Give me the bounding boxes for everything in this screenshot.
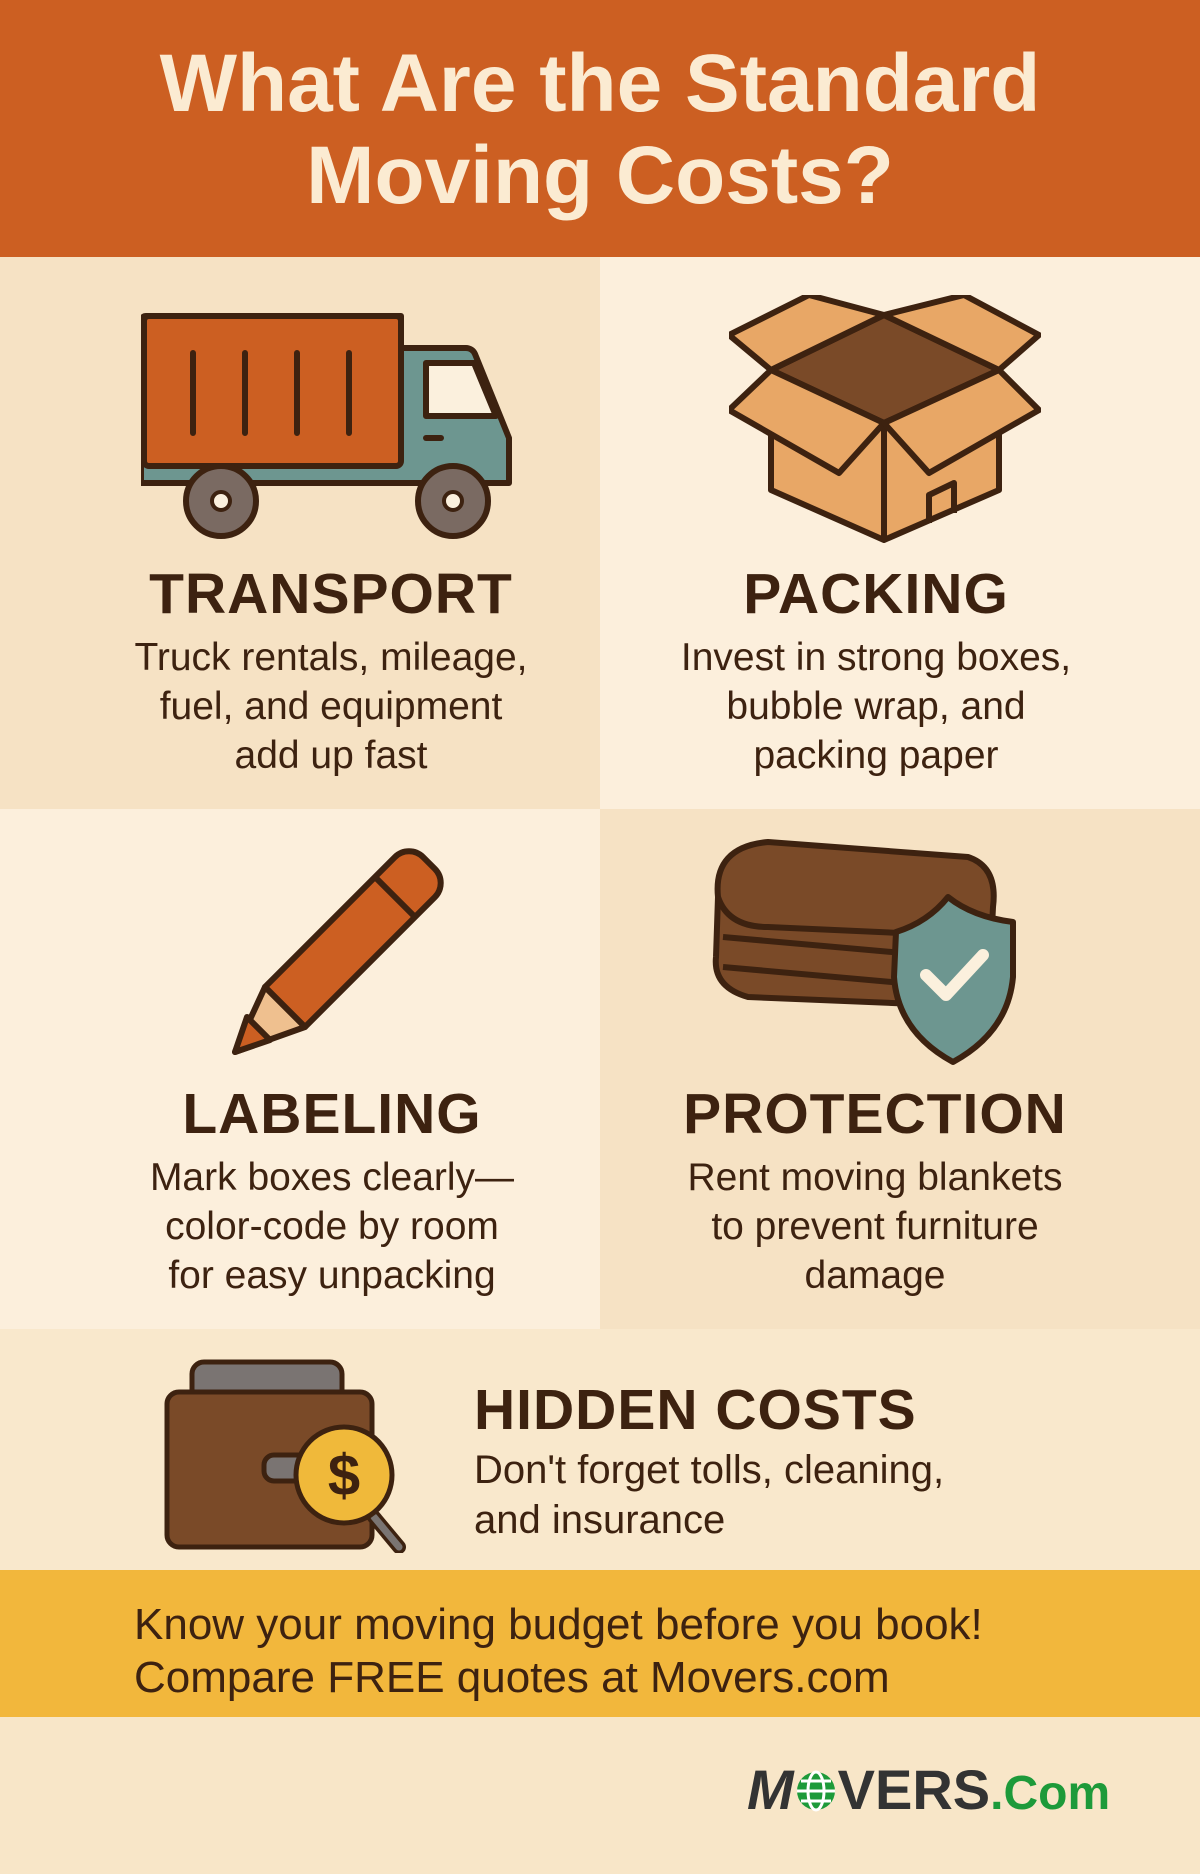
title: What Are the Standard bbox=[160, 38, 1040, 129]
heading: labeling: LABELING bbox=[182, 1082, 482, 1146]
callout text bbox=[134, 1600, 983, 1702]
logo: movers.com: M VERS.Com bbox=[747, 1758, 1110, 1821]
text: packing bbox=[681, 636, 1071, 777]
text: protection: damage bbox=[805, 1254, 945, 1297]
text: hidden costs: Don't forget tolls, cleaning, bbox=[474, 1448, 944, 1492]
heading: packing: PACKING bbox=[743, 562, 1009, 626]
callout banner bbox=[0, 1570, 1200, 1717]
text: labeling: Mark boxes clearly— bbox=[150, 1156, 514, 1199]
text: transport: add up fast bbox=[234, 734, 427, 777]
icon: wallet with coin: $ bbox=[328, 1443, 360, 1508]
callout text: Compare FREE quotes at Movers.com bbox=[134, 1653, 890, 1702]
title bbox=[160, 38, 1040, 221]
text: transport bbox=[134, 636, 528, 777]
text: hidden costs bbox=[474, 1448, 944, 1542]
header banner bbox=[0, 0, 1200, 257]
panel: protection bbox=[600, 809, 1200, 1329]
text: protection: to prevent furniture bbox=[711, 1205, 1039, 1248]
panel: packing bbox=[600, 257, 1200, 809]
text: packing: bubble wrap, and bbox=[726, 685, 1026, 728]
panel: hidden costs bbox=[0, 1329, 1200, 1570]
text: packing: Invest in strong boxes, bbox=[681, 636, 1071, 679]
icon: box bbox=[729, 295, 1041, 543]
text: labeling: color-code by room bbox=[165, 1205, 499, 1248]
panel: labeling bbox=[0, 809, 600, 1329]
heading: protection: PROTECTION bbox=[683, 1082, 1067, 1146]
text: protection bbox=[687, 1156, 1063, 1297]
icon: pencil bbox=[232, 848, 444, 1055]
text: packing: packing paper bbox=[753, 734, 998, 777]
callout text: Know your moving budget before you book! bbox=[134, 1600, 983, 1649]
text: hidden costs: and insurance bbox=[474, 1498, 725, 1542]
panel: transport bbox=[0, 257, 600, 809]
icon: blankets and shield bbox=[712, 839, 1016, 1065]
text: labeling: for easy unpacking bbox=[168, 1254, 496, 1297]
text: transport: Truck rentals, mileage, bbox=[134, 636, 528, 679]
heading: transport: TRANSPORT bbox=[149, 562, 513, 626]
text: transport: fuel, and equipment bbox=[160, 685, 502, 728]
title: Moving Costs? bbox=[306, 130, 894, 221]
heading: hidden costs: HIDDEN COSTS bbox=[474, 1378, 917, 1442]
text: protection: Rent moving blankets bbox=[687, 1156, 1063, 1199]
text: labeling bbox=[150, 1156, 514, 1297]
icon: truck bbox=[141, 313, 512, 539]
icon: wallet with coin bbox=[164, 1360, 406, 1553]
